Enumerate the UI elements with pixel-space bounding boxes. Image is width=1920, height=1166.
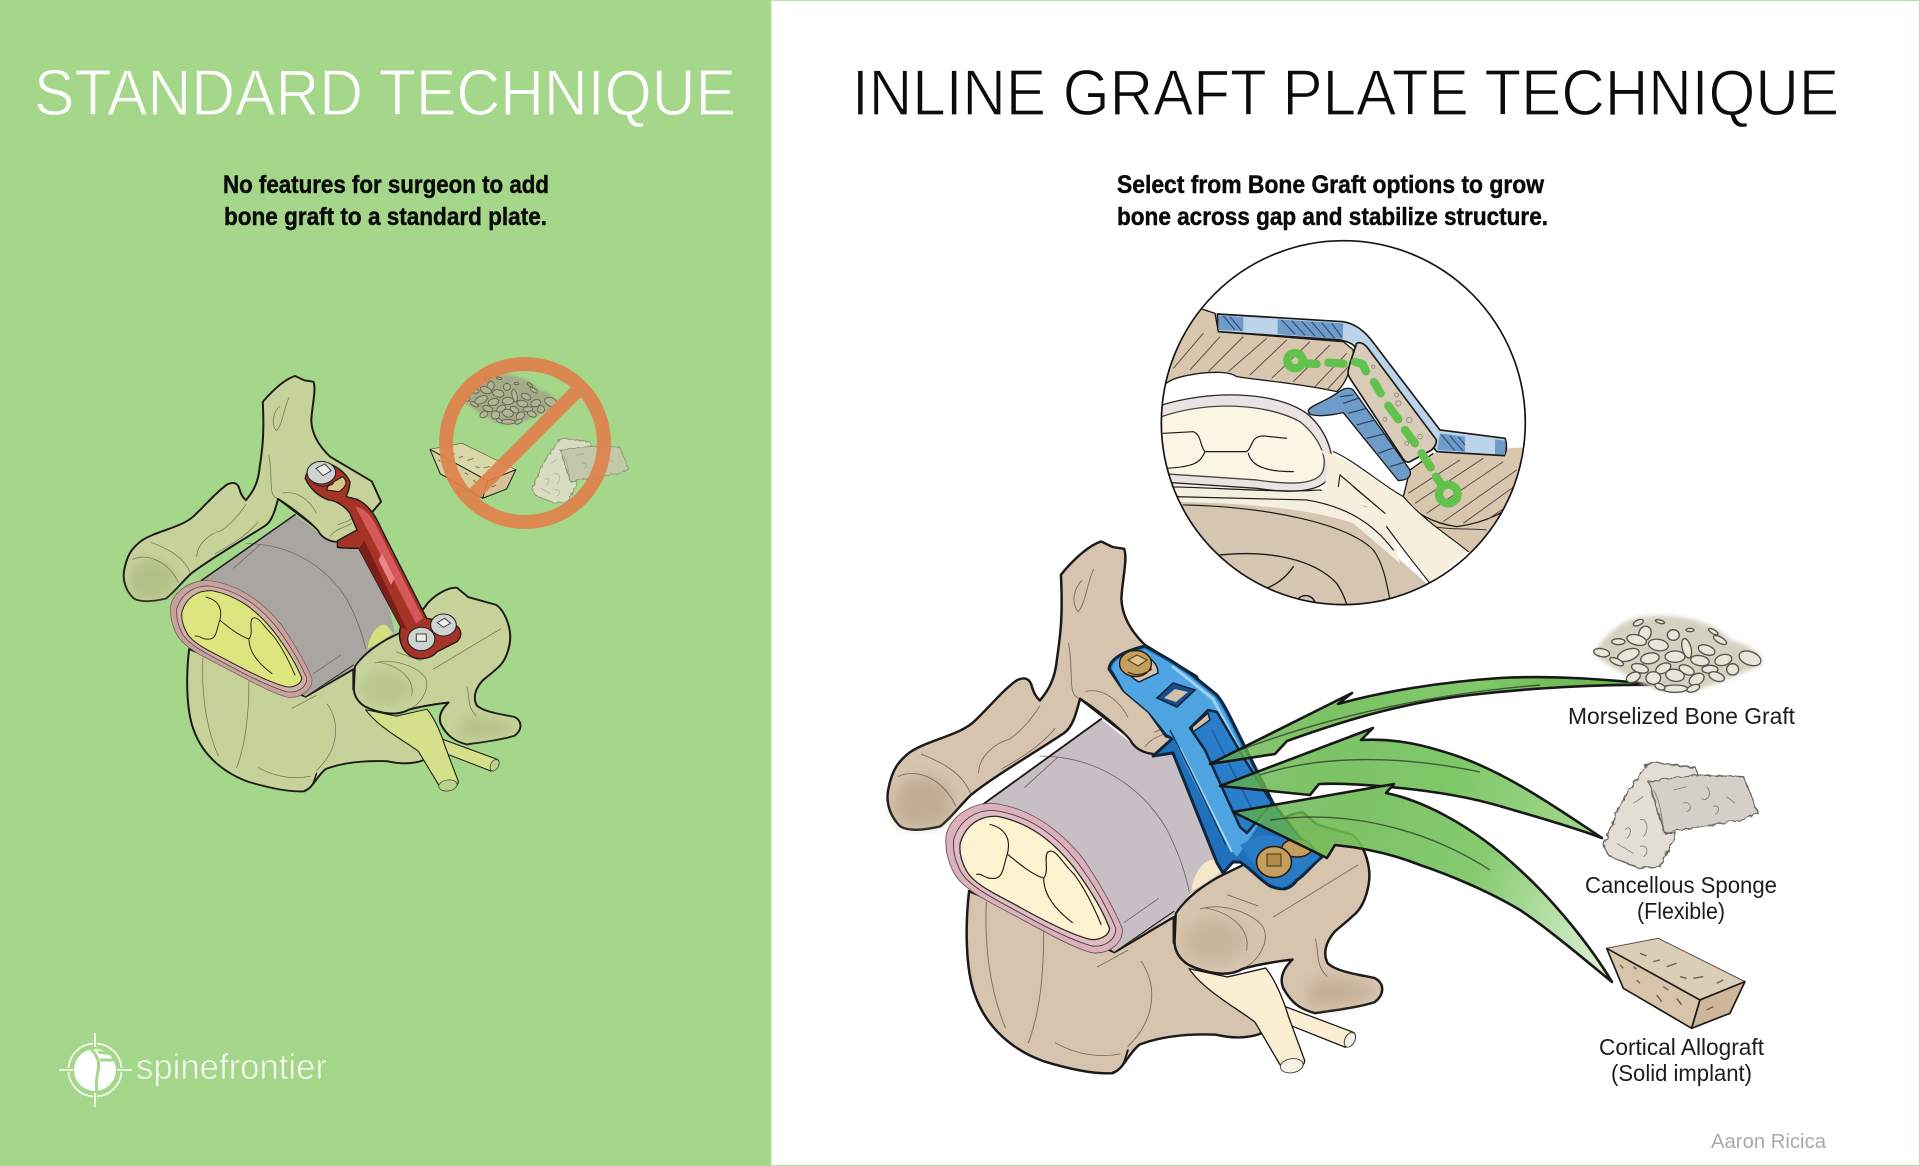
arrow: cortical allograft to plate	[1233, 784, 1612, 982]
title: standard technique: STANDARD TECHNIQUE	[34, 56, 736, 129]
arrow: green dashed graft path	[1287, 353, 1458, 503]
text block: standard technique description: bone graft to a standard plate.	[224, 203, 547, 231]
panel: inline graft plate technique background	[771, 0, 1920, 1166]
label: cancellous sponge: (Flexible)	[1637, 898, 1725, 924]
implant: bone graft block	[1348, 343, 1436, 462]
label: cortical allograft: Cortical Allograft	[1599, 1034, 1765, 1060]
cross section: spinal canal	[1157, 395, 1393, 550]
icon: orange no symbol	[446, 364, 604, 522]
logo: spinefrontier	[59, 1033, 327, 1107]
icon: screw	[431, 614, 456, 636]
arrow: cancellous sponge to plate	[1220, 728, 1602, 838]
graft: morselized bone	[461, 374, 559, 425]
icon: gold screw	[1120, 650, 1152, 676]
graft: cortical allograft	[430, 443, 516, 498]
text block: standard technique description	[223, 171, 549, 231]
icon: prohibited bone graft options	[430, 364, 629, 522]
plate: blue inline graft plate	[1109, 646, 1322, 889]
panel: standard technique background	[0, 0, 771, 1166]
label: cancellous sponge: Cancellous Sponge	[1585, 872, 1777, 898]
icon: front gold screw	[1256, 846, 1292, 878]
graft: cortical allograft	[1607, 938, 1745, 1028]
label: cancellous sponge	[1585, 872, 1777, 924]
text: brand name: spinefrontier	[136, 1046, 327, 1087]
cross section: lower lamina bone	[1402, 447, 1523, 552]
label: morselized bone graft: Morselized Bone Graft	[1568, 703, 1796, 729]
icon: screw	[307, 461, 336, 486]
title: inline graft plate technique: INLINE GRAFT PLATE TECHNIQUE	[852, 56, 1839, 129]
inset: cross section magnifier circle	[1157, 241, 1540, 610]
text block: standard technique description: No features for surgeon to add	[223, 171, 549, 199]
text block: inline graft description: Select from Bone Graft options to grow	[1117, 171, 1545, 199]
text block: inline graft description: bone across gap and stabilize structure.	[1117, 203, 1548, 231]
illustration: vertebra with blue inline graft plate	[888, 541, 1382, 1075]
text block: inline graft description	[1117, 171, 1548, 231]
icon: logo crosshair mark	[59, 1033, 132, 1107]
label: cortical allograft: (Solid implant)	[1611, 1060, 1752, 1086]
icon: rear gold screw	[1282, 839, 1312, 857]
graft: cancellous sponge	[532, 438, 629, 503]
arrow: morselized bone graft to plate	[1210, 677, 1663, 764]
label: cortical allograft	[1599, 1034, 1765, 1086]
graft: morselized bone graft	[1593, 616, 1763, 694]
cross section: vertebral body	[1180, 502, 1427, 604]
graft: cancellous sponge	[1603, 762, 1758, 868]
plate: red standard plate	[305, 461, 461, 659]
icon: screw	[408, 627, 435, 651]
cross section: nerve root	[1183, 450, 1468, 600]
illustration: vertebra with standard red plate	[124, 376, 521, 792]
credit: artist name: Aaron Ricica	[1711, 1131, 1827, 1153]
implant: blue plate cross section	[1217, 314, 1506, 481]
cross section: upper lamina bone	[1160, 308, 1353, 392]
